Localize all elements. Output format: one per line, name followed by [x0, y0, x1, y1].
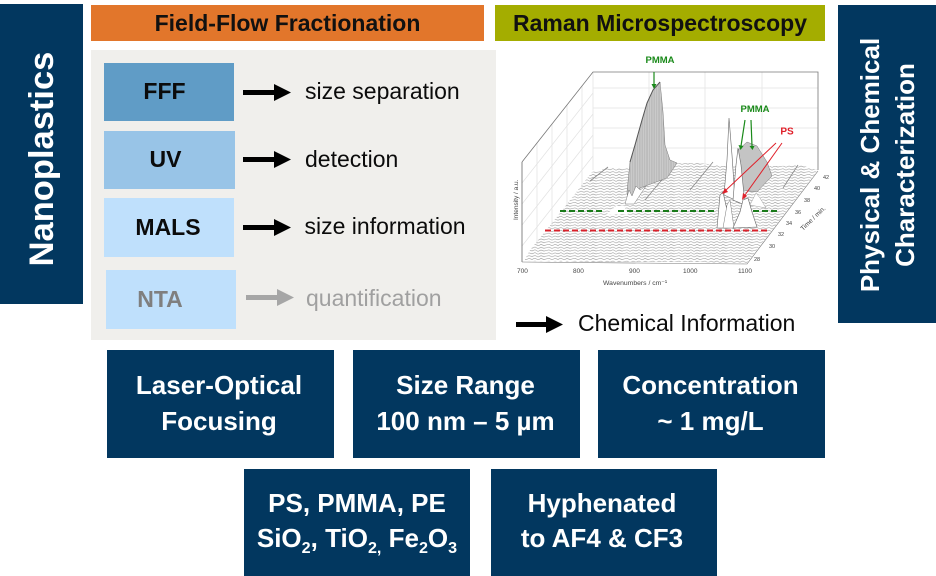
text: size separation: size separation: [305, 78, 460, 104]
box: Concentration: Concentration: [622, 370, 799, 400]
axis labels: 1100: [738, 268, 752, 275]
box: MALS: [104, 198, 234, 257]
text: size information: size information: [304, 213, 466, 239]
panel: FFF techniques: [91, 50, 496, 340]
arrow: NTA to quantification: [246, 289, 294, 306]
axis labels: Time / min.: [800, 205, 827, 232]
axis labels: Intensity / a.u.: [513, 179, 520, 220]
box: Size Range: 100 nm – 5 µm: [376, 406, 555, 436]
label and arrow: PMMA main peak: [645, 55, 675, 89]
axis labels: 1000: [683, 268, 698, 275]
heading: Physical & Chemical Characterization: Characterization: [890, 63, 920, 267]
secondary peaks: [717, 118, 772, 228]
red dashed marker line: [545, 230, 768, 232]
heading: Field-Flow Fractionation: Field-Flow Fractionation: [155, 10, 420, 36]
box: Hyphenated to AF4 & CF3: Hyphenated: [528, 488, 676, 518]
box: Laser-Optical Focusing: [107, 350, 334, 458]
text: detection: detection: [305, 146, 398, 172]
green dashed marker line: [560, 210, 780, 212]
chart walls and grid: [522, 72, 818, 264]
arrow: to chemical information: [516, 316, 563, 333]
box: FFF: FFF: [143, 78, 186, 104]
box: Size Range: Size Range: [396, 370, 535, 400]
axis labels: Wavenumbers / cm⁻¹: [603, 280, 668, 287]
box: materials: [244, 469, 470, 576]
axis labels: 30: [769, 244, 775, 250]
box: NTA: [106, 270, 236, 329]
arrow: FFF to size separation: [243, 84, 291, 101]
box: UV: [104, 131, 235, 189]
heading: Physical & Chemical Characterization: [855, 38, 920, 292]
box: materials: SiO2, TiO2, Fe2O3: [257, 523, 457, 557]
box: Laser-Optical Focusing: Focusing: [161, 406, 277, 436]
axis labels: [513, 175, 829, 287]
panel: Nanoplastics side label: [0, 4, 83, 304]
box: MALS: MALS: [135, 214, 201, 240]
box: Hyphenated to AF4 & CF3: to AF4 & CF3: [521, 523, 683, 553]
panel: Physical and Chemical Characterization side label: [838, 5, 936, 323]
label and arrows: PS: PS: [780, 126, 794, 138]
axis labels: 38: [804, 198, 810, 204]
label and arrows: PS: [722, 126, 794, 200]
heading: Physical & Chemical Characterization: Physical & Chemical: [855, 38, 885, 292]
axis labels: 36: [795, 210, 801, 216]
box: Concentration: ~ 1 mg/L: [657, 406, 764, 436]
chart: Raman 3D waterfall spectrum: [513, 55, 829, 287]
axis labels: 800: [573, 268, 584, 275]
heading: Raman Microspectroscopy: [495, 5, 825, 41]
axis labels: 28: [754, 257, 760, 263]
text: Chemical Information: Chemical Information: [578, 310, 795, 336]
label and arrow: PMMA main peak: PMMA: [645, 55, 675, 66]
box: UV: UV: [150, 146, 181, 172]
box: FFF: [104, 63, 234, 121]
heading: Field-Flow Fractionation: [91, 5, 484, 41]
heading: Nanoplastics: Nanoplastics: [23, 52, 61, 266]
axis labels: 32: [778, 232, 784, 238]
noisy floor of spectra: [524, 163, 818, 264]
heading: Raman Microspectroscopy: Raman Microspectroscopy: [513, 10, 807, 36]
axis labels: 42: [823, 175, 829, 181]
axis labels: 900: [629, 268, 640, 275]
box: Hyphenated to AF4 & CF3: [491, 469, 717, 576]
arrow: UV to detection: [243, 151, 291, 168]
arrow: MALS to size information: [243, 219, 291, 236]
main PMMA peak: [625, 82, 677, 204]
label and arrows: PMMA secondary peaks: [738, 104, 770, 150]
box: Laser-Optical Focusing: Laser-Optical: [136, 370, 302, 400]
text: quantification: quantification: [306, 285, 442, 311]
box: Concentration: [598, 350, 825, 458]
axis labels: 34: [786, 221, 792, 227]
axis labels: 700: [517, 268, 528, 275]
axis labels: 40: [814, 186, 820, 192]
ridge lines on the floor: [590, 162, 798, 200]
box: NTA: NTA: [137, 286, 183, 312]
box: materials: PS, PMMA, PE: [268, 488, 446, 518]
white notch below main peak: [606, 206, 628, 215]
label and arrows: PMMA secondary peaks: PMMA: [740, 104, 770, 115]
box: Size Range: [353, 350, 580, 458]
